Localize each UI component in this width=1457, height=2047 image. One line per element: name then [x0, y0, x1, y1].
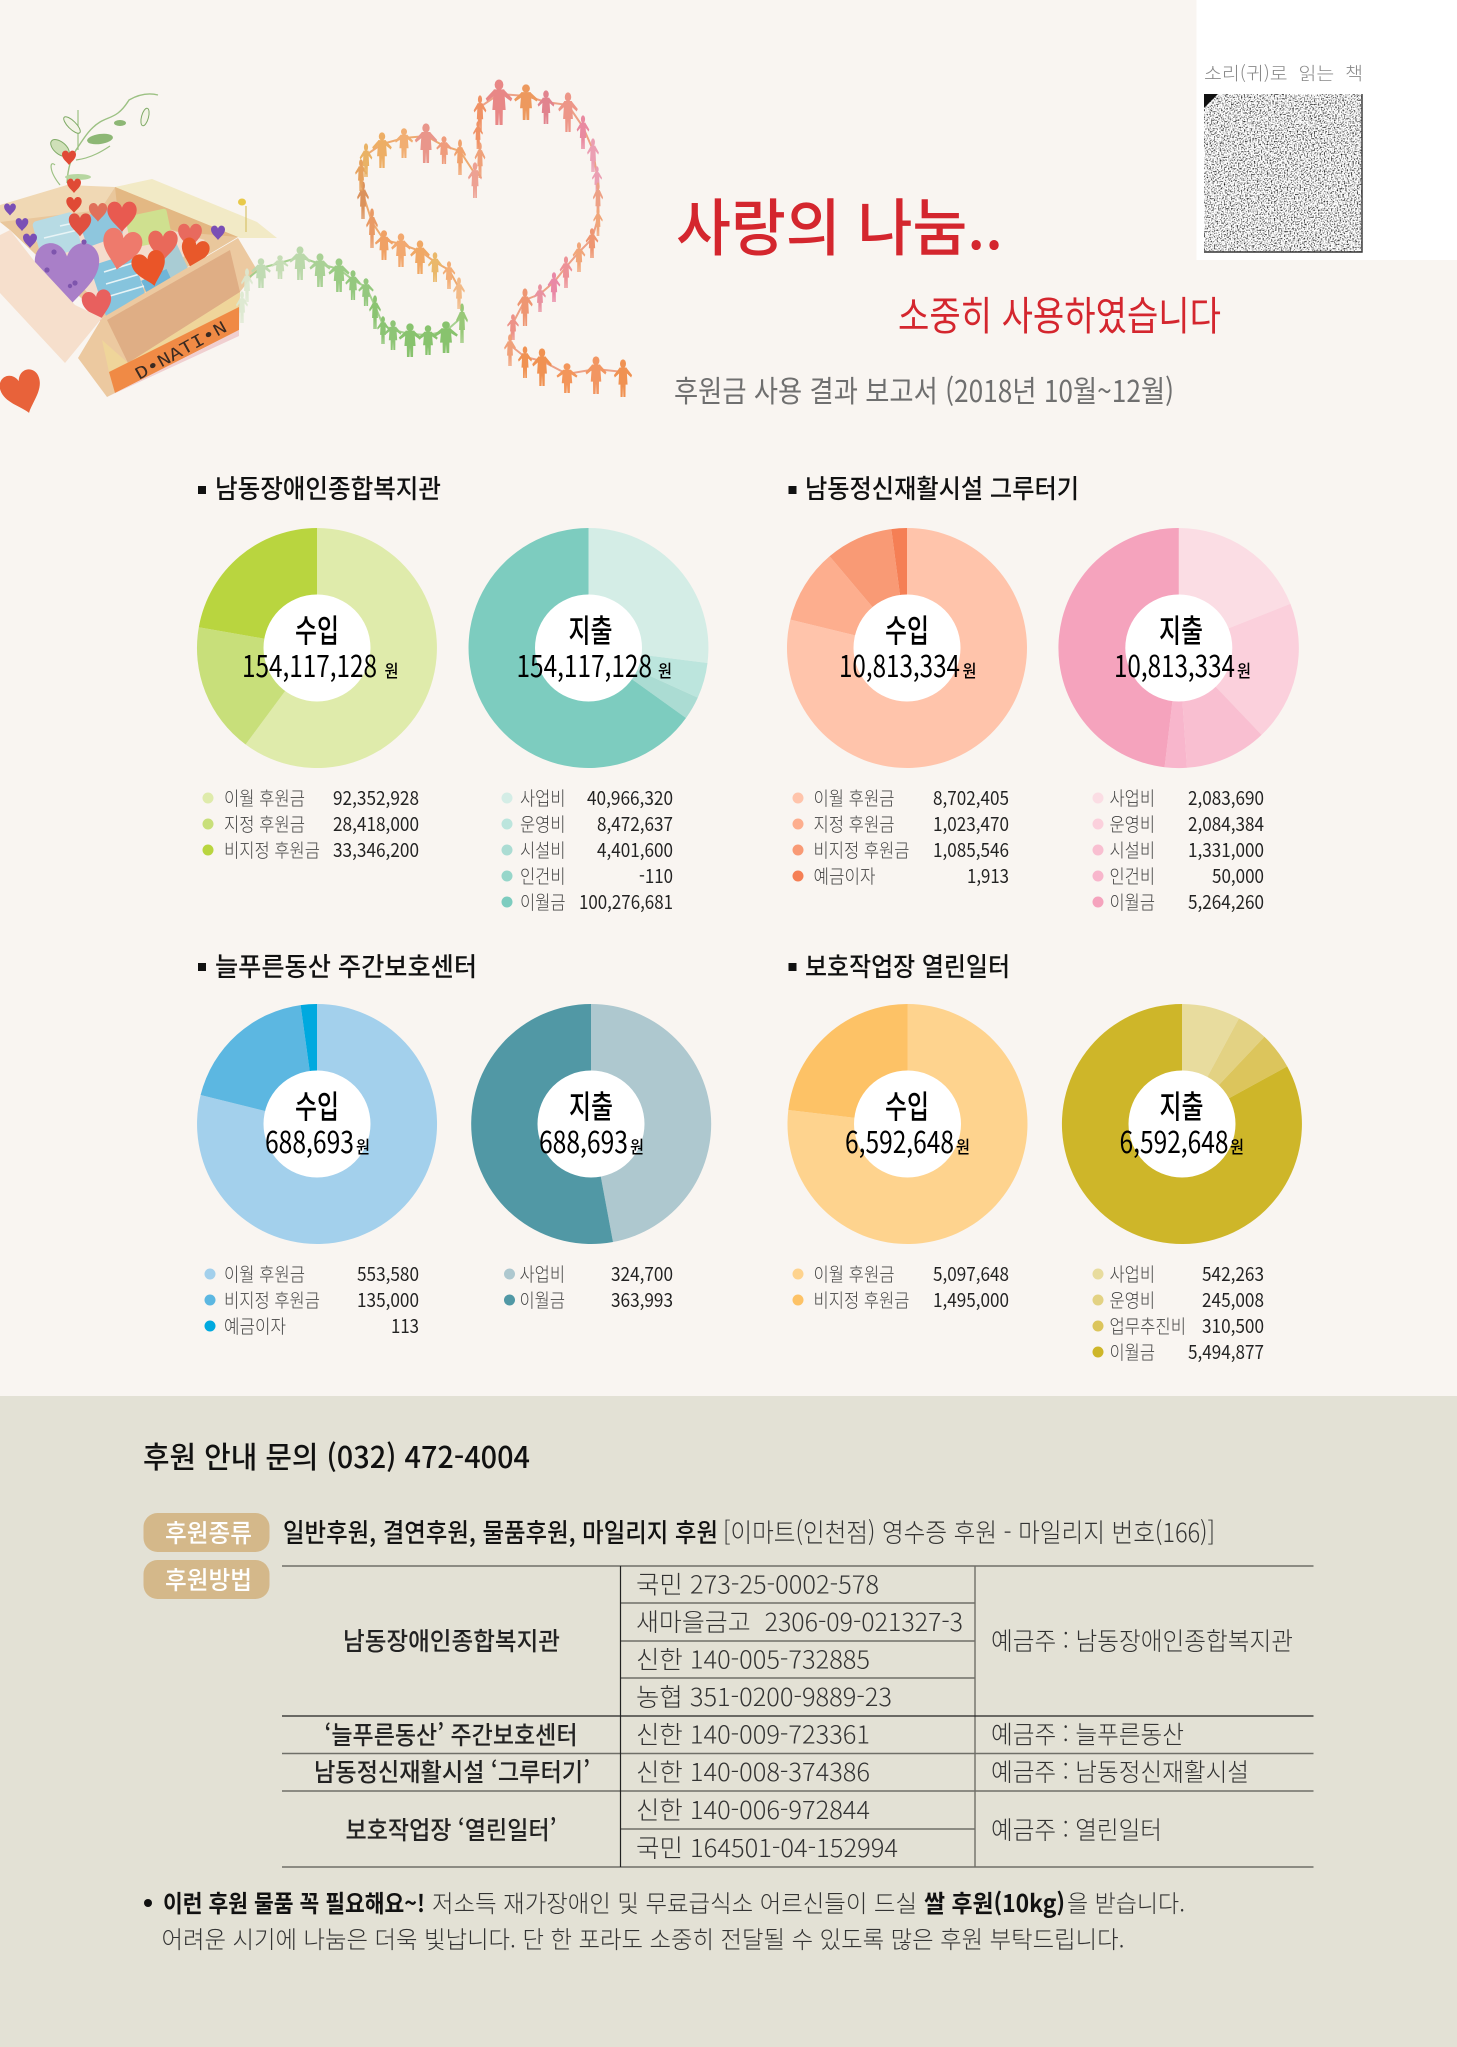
- pill: donation method: [144, 1560, 270, 1599]
- donut: expense: [469, 528, 708, 768]
- expense legend: 5,264,260: [1188, 888, 1264, 915]
- pill: donation method: 후원방법: [165, 1561, 252, 1597]
- table column: account holders: 예금주 : 남동정신재활시설: [991, 1753, 1249, 1789]
- icon: sprouting vine: [48, 94, 246, 232]
- heading: 남동정신재활시설 그루터기: [805, 469, 1079, 506]
- income legend: 이월 후원금: [224, 784, 305, 811]
- donation types text: 일반후원, 결연후원, 물품후원, 마일리지 후원: [283, 1513, 718, 1550]
- income legend: 지정 후원금: [814, 810, 894, 837]
- expense legend: 시설비: [1110, 836, 1155, 863]
- table column: account numbers: 신한 140-006-972844: [636, 1791, 870, 1827]
- expense legend: 363,993: [611, 1286, 673, 1313]
- footer appeal text: 저소득 재가장애인 및 무료급식소 어르신들이 드실: [432, 1884, 917, 1919]
- expense legend: 2,084,384: [1188, 810, 1264, 837]
- expense legend: 시설비: [520, 836, 566, 863]
- expense legend: 이월금: [1110, 888, 1155, 915]
- income legend: 예금이자: [224, 1312, 286, 1339]
- panel: audio code box: [1196, 0, 1457, 260]
- table column: account numbers: 신한 140-009-723361: [636, 1716, 870, 1752]
- panel: 보호작업장 열린일터: [787, 947, 1302, 1365]
- pill: donation type: [144, 1513, 270, 1552]
- income legend: 1,913: [967, 862, 1009, 889]
- expense legend: 사업비: [1110, 1260, 1155, 1287]
- income legend: 28,418,000: [333, 810, 419, 837]
- income legend: 1,495,000: [933, 1286, 1009, 1313]
- title: 사랑의 나눔: 사랑의 나눔..: [676, 178, 1003, 268]
- box label text: D•NATI•N: [132, 318, 231, 385]
- donut: expense: 원: [1230, 1133, 1244, 1158]
- income legend: 135,000: [357, 1286, 419, 1313]
- donut: expense: 지출: [569, 1082, 613, 1128]
- donut: income: 154,117,128: [242, 642, 377, 686]
- donut: income: 6,592,648: [845, 1118, 954, 1162]
- income legend: 553,580: [357, 1260, 419, 1287]
- expense legend: 310,500: [1202, 1312, 1264, 1339]
- expense legend: [1092, 1260, 1264, 1365]
- panel: 늘푸른동산 주간보호센터: [197, 947, 711, 1339]
- expense legend: 이월금: [1110, 1338, 1155, 1365]
- donut: income: 수입: [885, 606, 929, 652]
- income legend: [204, 1260, 419, 1339]
- box back flaps: [0, 185, 115, 230]
- donut: income: [197, 528, 437, 768]
- donut: income: 원: [962, 657, 976, 682]
- expense legend: 100,276,681: [579, 888, 673, 915]
- table column: organisations: 남동장애인종합복지관: [343, 1622, 560, 1658]
- table column: organisations: [314, 1622, 590, 1847]
- donut: income: 원: [384, 657, 398, 682]
- donut: income: 10,813,334: [839, 642, 960, 686]
- audio book caption: 소리(귀)로 읽는 책: [1204, 60, 1363, 86]
- income legend: 이월 후원금: [814, 1260, 894, 1287]
- expense legend: 업무추진비: [1110, 1312, 1186, 1339]
- donut: expense: 원: [1237, 657, 1251, 682]
- expense legend: [504, 1260, 673, 1313]
- donut: expense: 154,117,128: [516, 642, 652, 686]
- table column: account numbers: 신한 140-005-732885: [636, 1640, 870, 1676]
- table column: account holders: 예금주 : 남동장애인종합복지관: [991, 1622, 1293, 1658]
- income legend: [792, 1260, 1009, 1313]
- table column: organisations: 남동정신재활시설 ‘그루터기’: [314, 1753, 590, 1789]
- box contents: [32, 211, 82, 259]
- table column: account numbers: 국민 164501-04-152994: [636, 1829, 898, 1865]
- expense legend: 8,472,637: [597, 810, 673, 837]
- income legend: 비지정 후원금: [224, 1286, 320, 1313]
- table column: account numbers: 국민 273-25-0002-578: [636, 1566, 879, 1602]
- income legend: 비지정 후원금: [814, 836, 910, 863]
- heading: 보호작업장 열린일터: [805, 947, 1010, 984]
- expense legend: [1092, 784, 1264, 915]
- expense legend: 사업비: [520, 784, 566, 811]
- income legend: 예금이자: [814, 862, 876, 889]
- donut: expense: 지출: [1160, 1082, 1204, 1128]
- income legend: 5,097,648: [933, 1260, 1009, 1287]
- donut: income: 수입: [295, 606, 339, 652]
- panel: 남동정신재활시설 그루터기: [787, 469, 1299, 915]
- donut: expense: 10,813,334: [1114, 642, 1235, 686]
- panel: 남동장애인종합복지관: [197, 469, 708, 915]
- donut: expense: 6,592,648: [1120, 1118, 1228, 1162]
- expense legend: -110: [639, 862, 673, 889]
- donut: income: [787, 528, 1027, 768]
- income legend: 1,023,470: [933, 810, 1009, 837]
- donut: expense: 지출: [568, 606, 612, 652]
- donut: expense: 원: [658, 657, 672, 682]
- donut: income: 원: [956, 1133, 970, 1158]
- income legend: 이월 후원금: [814, 784, 894, 811]
- donut: income: 688,693: [265, 1118, 354, 1162]
- report period line: 후원금 사용 결과 보고서 (2018년 10월~12월): [674, 367, 1174, 411]
- donut: expense: [471, 1004, 711, 1244]
- table column: organisations: 보호작업장 ‘열린일터’: [346, 1811, 556, 1847]
- footer appeal text: [144, 1884, 1185, 1955]
- heading: 늘푸른동산 주간보호센터: [215, 947, 477, 984]
- donut: income: 원: [356, 1133, 370, 1158]
- table column: account holders: [991, 1622, 1293, 1847]
- illustration: donation box with hearts: [0, 179, 277, 397]
- footer appeal text: 어려운 시기에 나눔은 더욱 빛납니다. 단 한 포라도 소중히 전달될 수 있도록 많은 후원 부탁드립니다.: [162, 1920, 1124, 1955]
- expense legend: 5,494,877: [1188, 1338, 1264, 1365]
- donut: expense: [1058, 528, 1299, 768]
- donut: income: 수입: [885, 1082, 929, 1128]
- income legend: 지정 후원금: [224, 810, 305, 837]
- donut: income: [787, 1004, 1027, 1244]
- expense legend: 1,331,000: [1188, 836, 1264, 863]
- donut: expense: [1062, 1004, 1302, 1244]
- income legend: 113: [391, 1312, 419, 1339]
- contact heading: 후원 안내 문의 (032) 472-4004: [143, 1433, 530, 1477]
- expense legend: 245,008: [1202, 1286, 1264, 1313]
- expense legend: 인건비: [520, 862, 566, 889]
- table column: account numbers: 새마을금고 2306-09-021327-3: [636, 1603, 963, 1639]
- table column: account holders: 예금주 : 열린일터: [991, 1811, 1162, 1847]
- expense legend: 이월금: [520, 888, 566, 915]
- illustration: chain of people forming S and heart: [236, 79, 632, 397]
- expense legend: 이월금: [520, 1286, 565, 1313]
- donut: expense: 688,693: [539, 1118, 628, 1162]
- bank account table: [282, 1566, 1314, 1867]
- icon: heart bottom left: [0, 367, 48, 419]
- income legend: 8,702,405: [933, 784, 1009, 811]
- footer appeal text: 이런 후원 물품 꼭 필요해요~!: [163, 1884, 425, 1919]
- table column: account numbers: [636, 1566, 963, 1865]
- income legend: 1,085,546: [933, 836, 1009, 863]
- expense legend: 운영비: [520, 810, 566, 837]
- income legend: 비지정 후원금: [814, 1286, 910, 1313]
- subtitle: 소중히 사용하였습니다: 소중히 사용하였습니다: [898, 284, 1221, 342]
- income legend: 33,346,200: [333, 836, 419, 863]
- income legend: 이월 후원금: [224, 1260, 305, 1287]
- expense legend: 2,083,690: [1188, 784, 1264, 811]
- expense legend: 사업비: [1110, 784, 1155, 811]
- table column: account holders: 예금주 : 늘푸른동산: [991, 1716, 1184, 1752]
- box front panels: [0, 230, 102, 363]
- expense legend: 사업비: [520, 1260, 565, 1287]
- table column: account numbers: 신한 140-008-374386: [636, 1753, 870, 1789]
- donut: income: [197, 1004, 437, 1244]
- donut: expense: 원: [630, 1133, 644, 1158]
- footer appeal text: 쌀 후원(10kg): [924, 1884, 1065, 1919]
- expense legend: 운영비: [1110, 810, 1155, 837]
- table column: account numbers: 농협 351-0200-9889-23: [636, 1678, 892, 1714]
- pill: donation type: 후원종류: [165, 1514, 252, 1550]
- expense legend: 인건비: [1110, 862, 1155, 889]
- expense legend: 50,000: [1212, 862, 1264, 889]
- donation types text: [이마트(인천점) 영수증 후원 - 마일리지 번호(166)]: [723, 1513, 1215, 1550]
- footer appeal text: 을 받습니다.: [1067, 1884, 1185, 1919]
- page background: [0, 0, 1457, 1396]
- table column: organisations: ‘늘푸른동산’ 주간보호센터: [324, 1716, 578, 1752]
- expense legend: 40,966,320: [587, 784, 673, 811]
- income legend: [202, 784, 419, 863]
- box label strip: [109, 307, 239, 393]
- panel: donation information band: [0, 1396, 1457, 2047]
- expense legend: 4,401,600: [597, 836, 673, 863]
- heading: 남동장애인종합복지관: [215, 469, 441, 506]
- expense legend: [502, 784, 673, 915]
- income legend: 92,352,928: [333, 784, 419, 811]
- income legend: [792, 784, 1009, 889]
- expense legend: 324,700: [611, 1260, 673, 1287]
- donut: income: 수입: [295, 1082, 339, 1128]
- donation types text: [283, 1513, 1215, 1550]
- expense legend: 542,263: [1202, 1260, 1264, 1287]
- voice code pattern: [1204, 94, 1362, 252]
- donut: expense: 지출: [1159, 606, 1203, 652]
- expense legend: 운영비: [1110, 1286, 1155, 1313]
- income legend: 비지정 후원금: [224, 836, 320, 863]
